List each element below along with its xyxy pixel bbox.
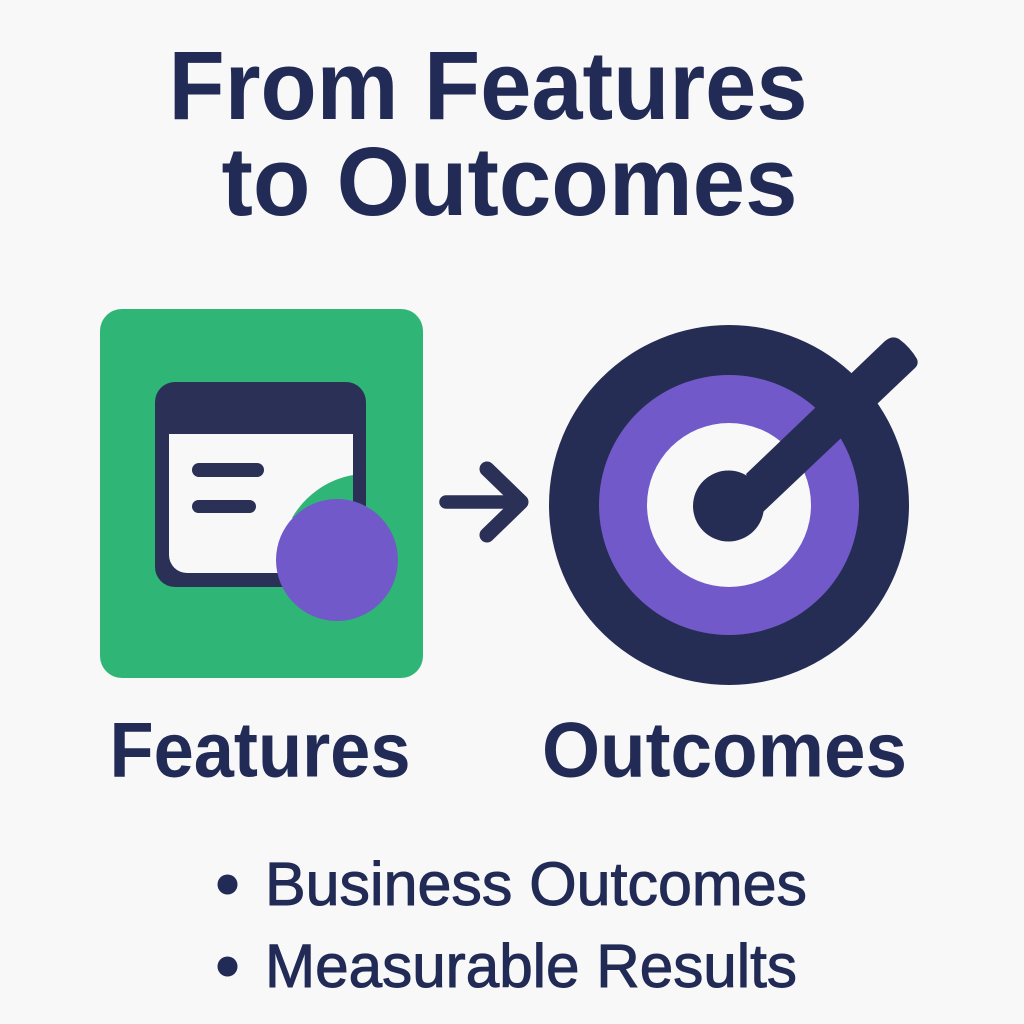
panel: outcomes target icon <box>549 325 918 685</box>
app window <box>155 382 366 587</box>
bullet list <box>218 850 807 1000</box>
bullet: business outcomes: Business Outcomes <box>265 850 807 918</box>
label: features: Features <box>110 706 410 794</box>
bullet: measurable results: Measurable Results <box>265 932 797 1000</box>
panel: features icon <box>100 309 423 678</box>
text lines <box>192 463 264 513</box>
green quarter shape <box>292 475 353 545</box>
dart <box>693 337 918 542</box>
title: From Features <box>168 31 808 140</box>
purple circle <box>276 499 398 621</box>
title: to Outcomes <box>222 127 798 236</box>
green tile <box>100 309 423 678</box>
arrow <box>446 469 521 535</box>
title <box>168 31 808 236</box>
label: outcomes: Outcomes <box>542 706 907 794</box>
